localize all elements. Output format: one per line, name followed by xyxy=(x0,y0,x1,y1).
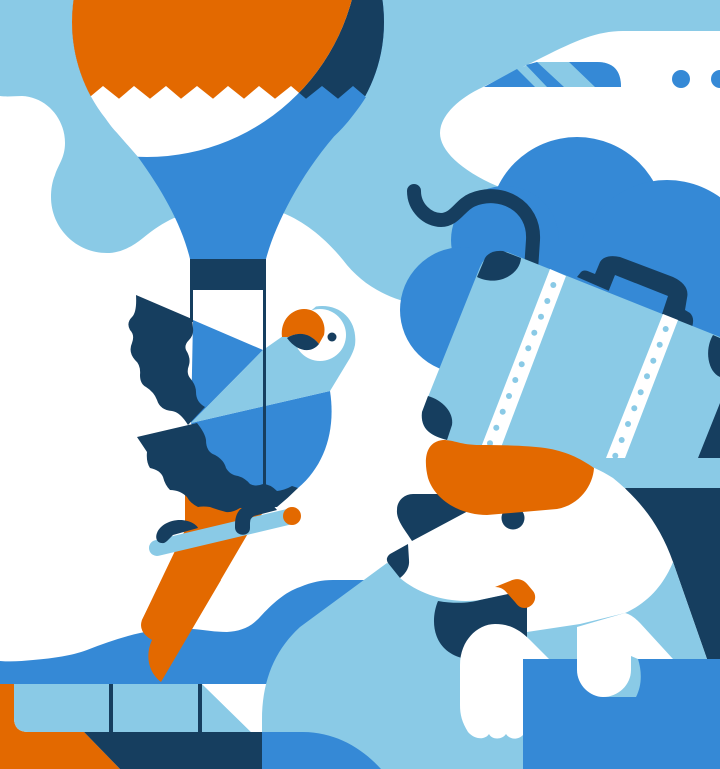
strap rivets xyxy=(487,282,669,459)
parrot body xyxy=(191,391,332,505)
dog tongue xyxy=(495,579,535,608)
orange floor xyxy=(0,684,120,769)
bottom left panel xyxy=(0,684,262,769)
window bar xyxy=(109,684,113,732)
airplane window dot xyxy=(672,70,690,88)
parrot crest xyxy=(282,309,325,344)
blue cloud xyxy=(400,137,720,373)
dog ear xyxy=(397,494,470,541)
orange tail xyxy=(141,490,280,682)
corner right xyxy=(708,335,720,377)
suitcase handle xyxy=(577,256,693,327)
upper wing blue xyxy=(191,320,263,423)
dog head xyxy=(390,462,673,632)
lower wing navy xyxy=(137,423,298,512)
parrot pupil xyxy=(328,332,336,342)
hook xyxy=(414,191,533,270)
perch xyxy=(157,516,292,548)
airplane window dot xyxy=(711,70,720,88)
parrot right foot xyxy=(235,504,277,535)
light triangle xyxy=(202,684,251,732)
balloon envelope xyxy=(72,0,384,259)
dog eye xyxy=(502,506,524,530)
upper wing navy xyxy=(128,295,205,425)
corner top left xyxy=(477,251,521,281)
parrot left foot xyxy=(156,520,198,543)
dog right paw xyxy=(577,630,631,697)
balloon collar xyxy=(190,259,266,290)
suitcase body xyxy=(422,252,720,488)
strap left xyxy=(480,269,566,450)
orange tail lower overlay xyxy=(141,580,221,682)
dog chest xyxy=(434,590,527,658)
bottom blue wave xyxy=(0,580,370,684)
parrot xyxy=(128,290,355,548)
navy triangle xyxy=(698,403,720,458)
strap right xyxy=(606,314,678,458)
suitcase xyxy=(422,251,720,488)
balloon rope left xyxy=(190,290,193,322)
dog left paw xyxy=(460,624,552,739)
dog xyxy=(387,440,673,739)
hot air balloon xyxy=(72,0,384,322)
light panel right xyxy=(527,562,707,659)
bottom blue shape xyxy=(262,732,381,769)
light blue dog body xyxy=(262,563,558,769)
blue box xyxy=(523,659,720,769)
dog nose xyxy=(387,544,409,578)
white triangle xyxy=(202,684,262,732)
parrot beak xyxy=(287,334,319,350)
airplane fuselage xyxy=(440,31,720,220)
window bar xyxy=(198,684,202,732)
parrot neck and head ring xyxy=(191,306,355,423)
navy panel right xyxy=(625,488,720,659)
paw shadow xyxy=(603,656,641,697)
airplane xyxy=(440,31,720,220)
corner bottom left xyxy=(422,396,452,440)
navy floor xyxy=(84,732,262,769)
perch end ball xyxy=(283,507,301,525)
light blue window xyxy=(14,684,198,732)
airplane windscreen xyxy=(484,62,621,87)
balloon rope over body xyxy=(263,290,266,486)
dog hair xyxy=(426,440,594,515)
dog arm xyxy=(577,613,673,659)
parrot eye white xyxy=(294,309,346,361)
